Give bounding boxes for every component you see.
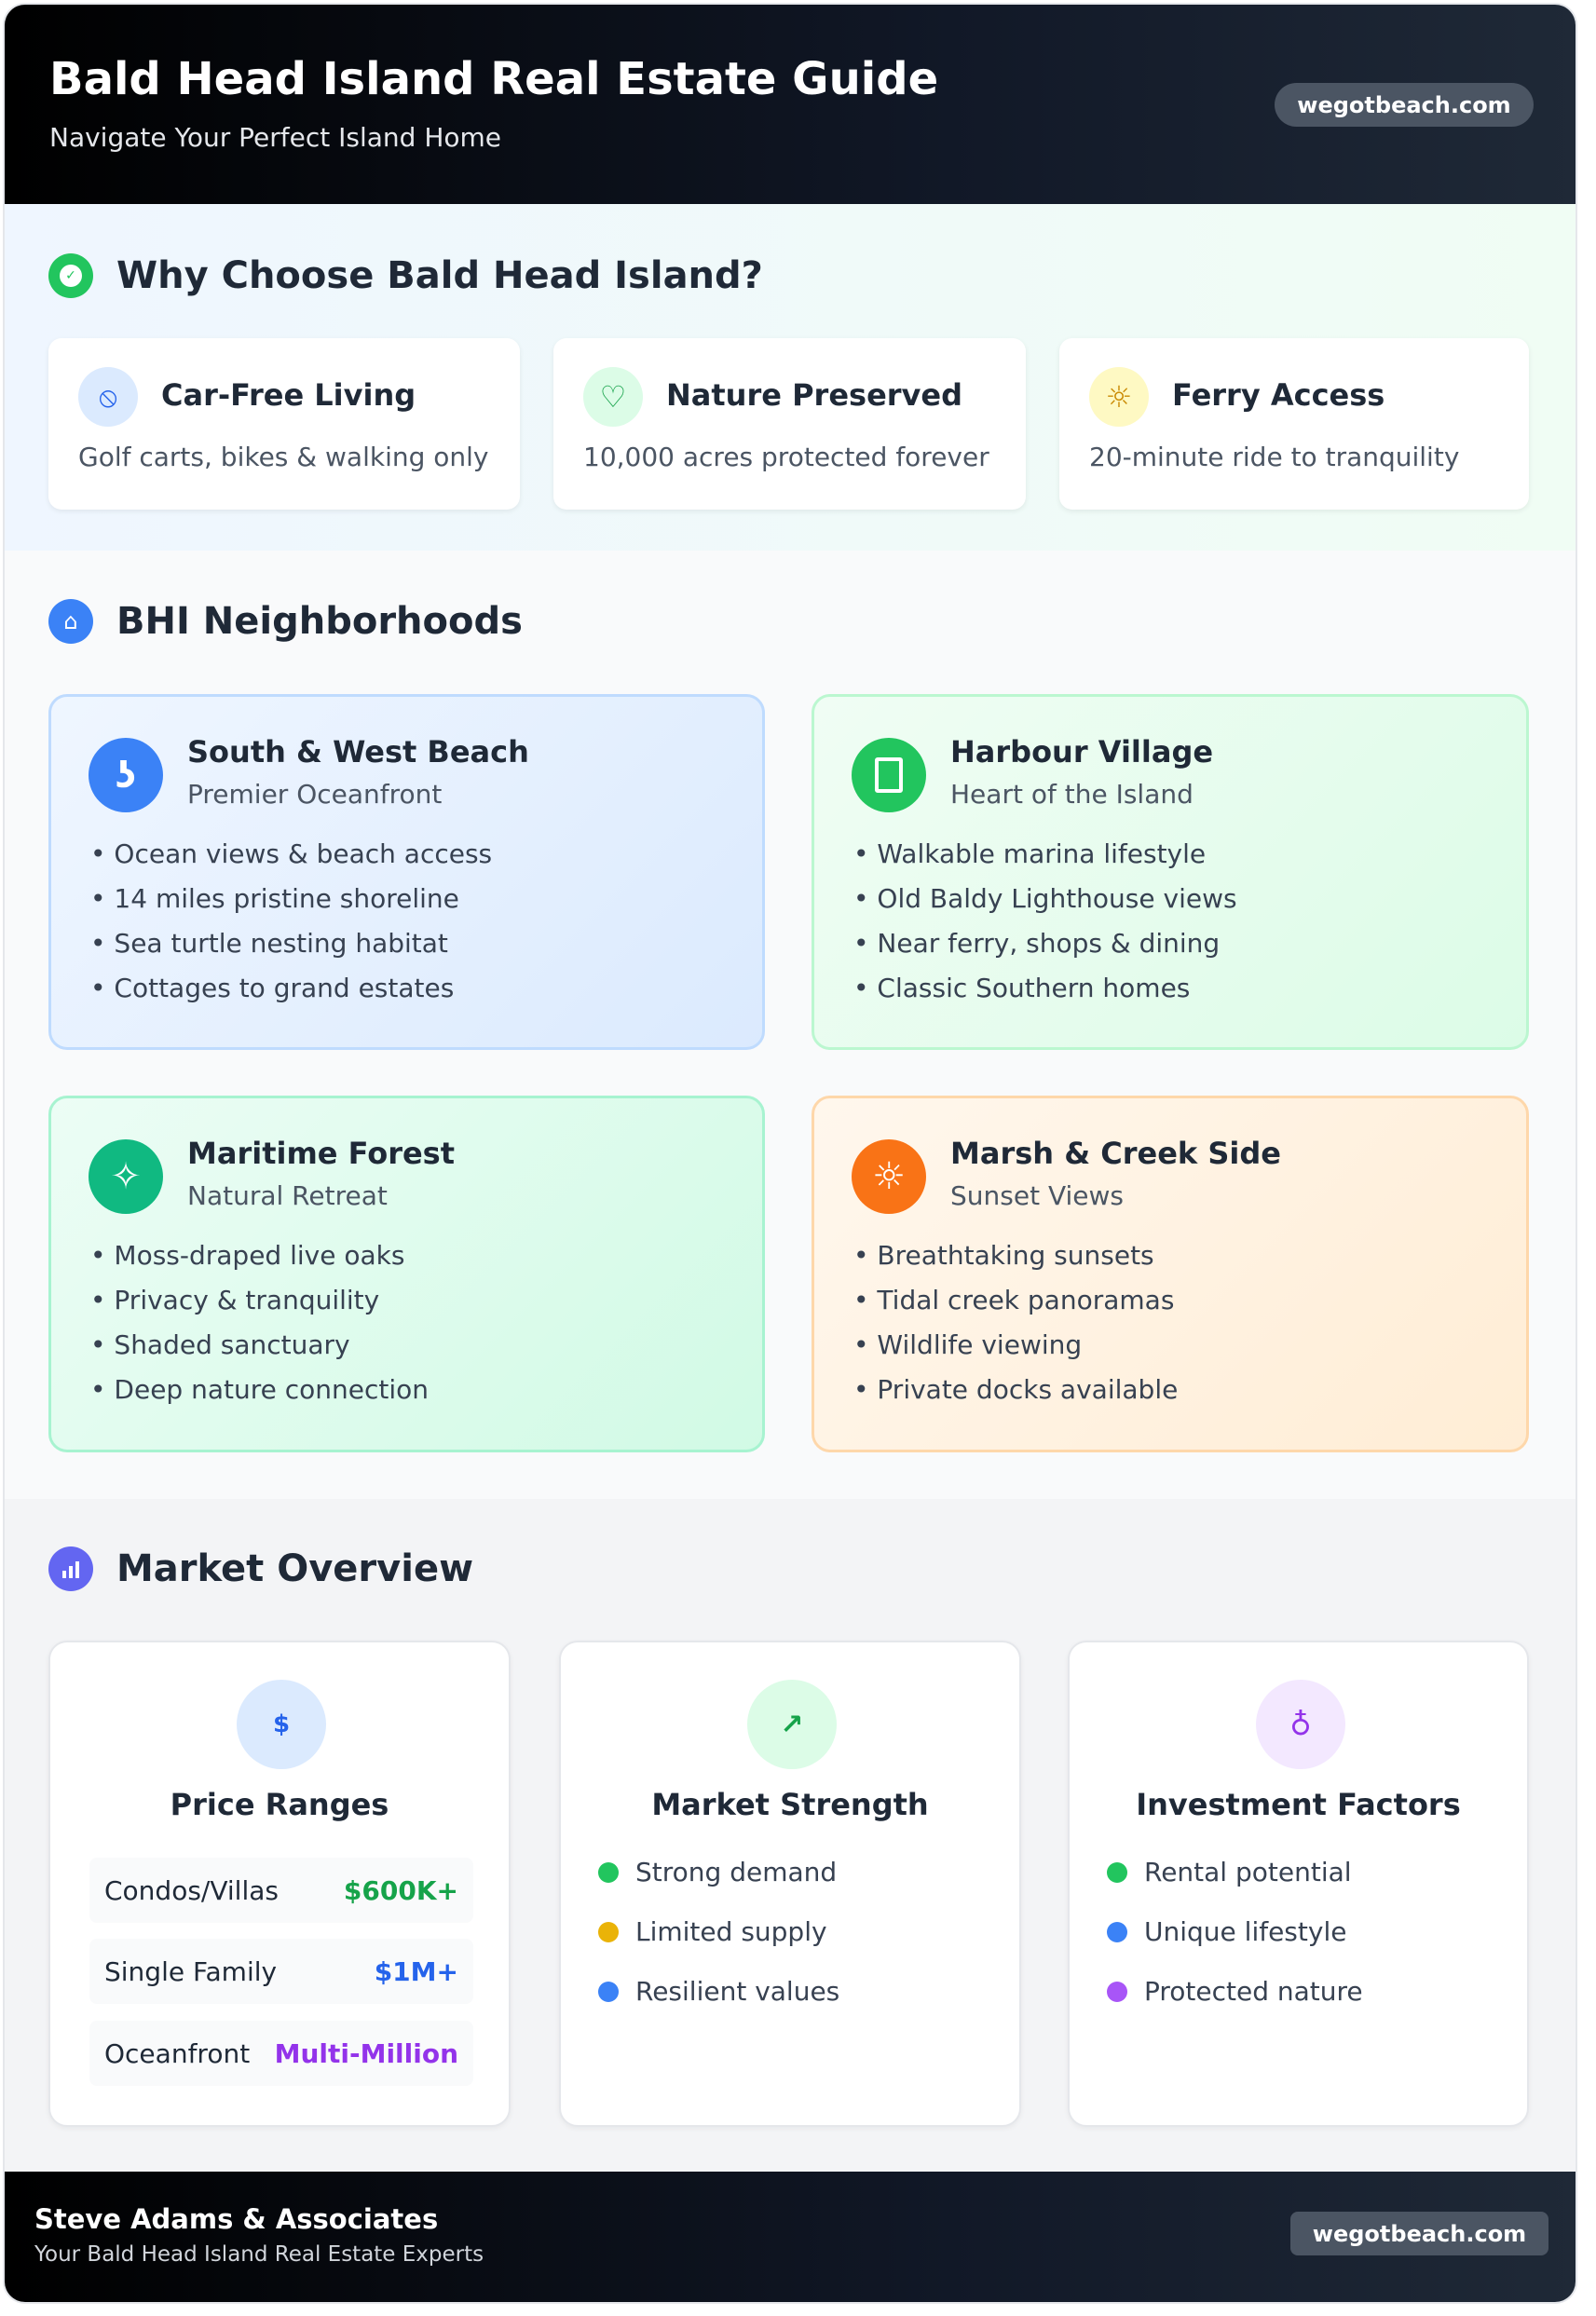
list: [853, 1240, 1178, 1405]
list: • Private docks available: [853, 1374, 1178, 1405]
section: why choose: [5, 204, 1576, 551]
icon: car-free: ⦸: [99, 380, 117, 414]
card: price ranges: Price Ranges: [171, 1787, 389, 1822]
section: neighborhoods: [5, 551, 1576, 1499]
card: price ranges: Oceanfront: [104, 2038, 250, 2068]
card: investment factors: Protected nature: [1144, 1976, 1363, 2007]
footer name: Steve Adams & Associates: [34, 2203, 438, 2235]
card: nature: [553, 338, 1026, 510]
heading: neighborhoods: BHI Neighborhoods: [116, 600, 523, 643]
card: price ranges: Multi-Million: [275, 2038, 458, 2068]
icon: chart: [48, 1546, 93, 1591]
card: investment factors: [1068, 1641, 1529, 2127]
card: ferry: Ferry Access: [1172, 377, 1385, 413]
price rows: $600K+: [344, 1874, 458, 1906]
icon: check circle: ✓: [65, 268, 76, 283]
card: nature: Nature Preserved: [666, 377, 962, 413]
icon: sun: ☼: [872, 1155, 906, 1198]
list: [853, 838, 1237, 1003]
card: market strength: Market Strength: [651, 1787, 929, 1822]
card: car-free: [48, 338, 520, 510]
card: market strength: [559, 1641, 1021, 2127]
card: maritime forest: Natural Retreat: [187, 1180, 388, 1211]
card: harbour village: Harbour Village: [950, 734, 1213, 770]
icon: trend: ↗: [780, 1709, 804, 1740]
list: • Sea turtle nesting habitat: [90, 928, 448, 959]
price rows: Condos/Villas: [104, 1874, 279, 1906]
card: investment factors: Investment Factors: [1136, 1787, 1461, 1822]
icon: home: [48, 599, 93, 644]
card: market strength: Resilient values: [635, 1976, 839, 2007]
card: harbour village: [812, 694, 1529, 1050]
card: maritime forest: Maritime Forest: [187, 1136, 455, 1171]
icon: bulb: [1256, 1680, 1345, 1769]
list: • Deep nature connection: [90, 1374, 429, 1405]
list: • Breathtaking sunsets: [853, 1240, 1154, 1271]
card: car-free: Golf carts, bikes & walking only: [78, 442, 488, 472]
card: south & west beach: South & West Beach: [187, 734, 529, 770]
list: • Near ferry, shops & dining: [853, 928, 1220, 959]
heading: market: Market Overview: [116, 1547, 473, 1590]
card: south & west beach: [48, 694, 765, 1050]
card: price ranges: $1M+: [375, 1956, 458, 1986]
price rows: [89, 1858, 473, 1923]
card: marsh & creek: [812, 1096, 1529, 1452]
heading: why choose: Why Choose Bald Head Island?: [116, 254, 763, 297]
list: Strong demand: [635, 1857, 837, 1887]
icon: dollar: [237, 1680, 326, 1769]
list: [90, 838, 492, 1003]
icon: heart: ♡: [600, 379, 626, 415]
section: market overview: [5, 1499, 1576, 2172]
icon: check circle: [48, 253, 93, 298]
card: price ranges: Single Family: [104, 1956, 277, 1986]
title: Bald Head Island Real Estate Guide: [49, 53, 938, 105]
footer badge: wegotbeach.com: [1313, 2221, 1526, 2247]
card: south & west beach: Premier Oceanfront: [187, 779, 442, 810]
list: • Cottages to grand estates: [90, 973, 454, 1003]
list: • Moss-draped live oaks: [90, 1240, 404, 1271]
card: maritime forest: [48, 1096, 765, 1452]
icon: bulb: ♁: [1289, 1707, 1312, 1742]
list: [90, 1240, 429, 1405]
footer badge: [1290, 2212, 1548, 2255]
icon: sun: [852, 1139, 926, 1214]
list: • Walkable marina lifestyle: [853, 838, 1206, 869]
card: ferry: [1059, 338, 1529, 510]
badge: wegotbeach.com: [1297, 91, 1511, 117]
icon: building: [852, 738, 926, 812]
card: car-free: Car-Free Living: [161, 377, 416, 413]
card: price ranges: [48, 1641, 511, 2127]
list: • Old Baldy Lighthouse views: [853, 883, 1237, 914]
list: • Wildlife viewing: [853, 1329, 1082, 1360]
footer: [5, 2172, 1576, 2302]
icon: trend: [747, 1680, 837, 1769]
icon: sun: [1089, 367, 1149, 427]
list: • Tidal creek panoramas: [853, 1285, 1174, 1315]
icon: sun: ☼: [1106, 379, 1132, 415]
card: market strength: Limited supply: [635, 1916, 827, 1947]
icon: home: ⌂: [63, 608, 78, 634]
header: [5, 5, 1576, 204]
icon: heart: [583, 367, 643, 427]
icon: dollar: $: [273, 1710, 290, 1738]
card: nature: 10,000 acres protected forever: [583, 442, 989, 472]
list: Rental potential: [1144, 1857, 1352, 1887]
card: investment factors: Unique lifestyle: [1144, 1916, 1346, 1947]
card: marsh & creek: Sunset Views: [950, 1180, 1124, 1211]
list: • Shaded sanctuary: [90, 1329, 350, 1360]
subtitle: Navigate Your Perfect Island Home: [49, 122, 501, 153]
icon: wave: [89, 738, 163, 812]
card: marsh & creek: Marsh & Creek Side: [950, 1136, 1281, 1171]
footer tagline: Your Bald Head Island Real Estate Experts: [34, 2242, 484, 2267]
icon: sparkle: [89, 1139, 163, 1214]
card: harbour village: Heart of the Island: [950, 779, 1194, 810]
list: • 14 miles pristine shoreline: [90, 883, 459, 914]
list: • Ocean views & beach access: [90, 838, 492, 869]
list: • Privacy & tranquility: [90, 1285, 379, 1315]
icon: sparkle: ✧: [110, 1155, 142, 1198]
badge: [1275, 83, 1534, 127]
icon: wave: ʖ: [116, 755, 136, 796]
icon: car-free: [78, 367, 138, 427]
list: • Classic Southern homes: [853, 973, 1190, 1003]
card: ferry: 20-minute ride to tranquility: [1089, 442, 1459, 472]
